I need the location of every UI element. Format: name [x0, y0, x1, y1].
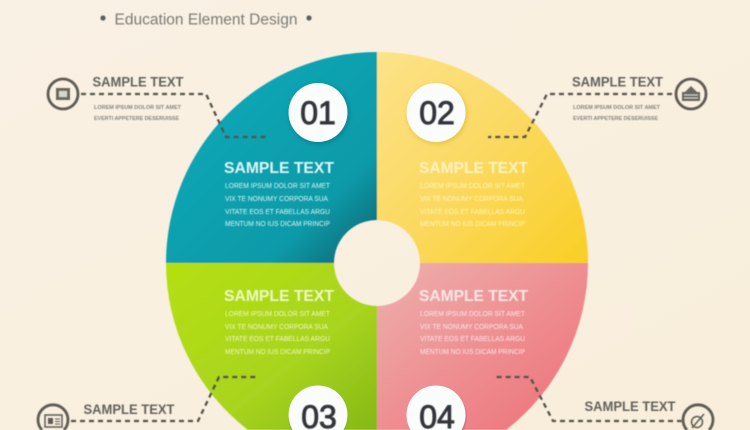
- icon: camera: [48, 79, 78, 109]
- connector 3: [71, 377, 257, 421]
- callout 3: [38, 402, 175, 430]
- panel 4 text: [419, 288, 528, 356]
- panel 2 text: MENTUM NO IUS DICAM PRINCIP: [420, 221, 525, 228]
- panel 2 text: VITATE EOS ET FABELLAS ARGU: [420, 209, 525, 216]
- segment 3: green: [166, 263, 377, 430]
- callout 3: SAMPLE TEXT: [84, 402, 175, 417]
- callout 1: LOREM IPSUM DOLOR SIT AMET: [94, 105, 182, 111]
- panel 1 text: SAMPLE TEXT: [224, 160, 334, 177]
- panel 4 text: SAMPLE TEXT: [419, 288, 528, 305]
- donut chart: [166, 52, 588, 430]
- panel 1 text: LOREM IPSUM DOLOR SIT AMET: [225, 183, 331, 190]
- icon: building: [676, 79, 706, 109]
- icon: disc: [683, 405, 713, 430]
- panel 3 text: SAMPLE TEXT: [224, 288, 334, 305]
- callout 4: SAMPLE TEXT: [584, 399, 676, 414]
- panel 3 text: [224, 288, 334, 356]
- callout 2: LOREM IPSUM DOLOR SIT AMET: [573, 105, 661, 111]
- panel 3 text: MENTUM NO IUS DICAM PRINCIP: [225, 349, 330, 356]
- panel 2 text: SAMPLE TEXT: [419, 160, 528, 177]
- panel 4 text: VITATE EOS ET FABELLAS ARGU: [420, 336, 525, 343]
- number badge 01: [288, 83, 349, 144]
- panel 3 text: VITATE EOS ET FABELLAS ARGU: [225, 336, 330, 343]
- number badge 01: 01: [300, 95, 336, 131]
- panel 4 text: LOREM IPSUM DOLOR SIT AMET: [420, 311, 526, 318]
- callout 4: [584, 399, 713, 430]
- panel 1 text: VITATE EOS ET FABELLAS ARGU: [225, 209, 330, 216]
- connector 2: [488, 94, 672, 137]
- callout 1: [48, 74, 184, 122]
- number badge 02: 02: [419, 95, 455, 131]
- number badge 03: [288, 385, 348, 430]
- panel 1 text: [224, 160, 334, 228]
- panel 4 text: MENTUM NO IUS DICAM PRINCIP: [420, 349, 525, 356]
- panel 3 text: LOREM IPSUM DOLOR SIT AMET: [225, 311, 331, 318]
- callout 2: EVERTI APPETERE DESERUISSE: [573, 116, 658, 122]
- segment 4: pink: [377, 263, 588, 430]
- panel 2 text: VIX TE NONUMY CORPORA SUA: [420, 196, 523, 203]
- connector 1: [81, 94, 266, 137]
- callout 2: [572, 74, 706, 122]
- callout 2: SAMPLE TEXT: [572, 74, 664, 90]
- number badge 04: [406, 385, 467, 430]
- panel 4 text: VIX TE NONUMY CORPORA SUA: [420, 324, 523, 331]
- title: Education Element Design: [114, 12, 298, 28]
- panel 2 text: LOREM IPSUM DOLOR SIT AMET: [420, 183, 526, 190]
- panel 1 text: MENTUM NO IUS DICAM PRINCIP: [225, 221, 330, 228]
- connector 4: [495, 377, 682, 421]
- panel 3 text: VIX TE NONUMY CORPORA SUA: [225, 324, 328, 331]
- number badge 02: [406, 83, 467, 144]
- segment 2: yellow: [377, 52, 588, 263]
- panel 1 text: VIX TE NONUMY CORPORA SUA: [225, 196, 328, 203]
- callout 1: SAMPLE TEXT: [92, 74, 184, 90]
- segment 1: teal: [166, 52, 377, 263]
- callout 1: EVERTI APPETERE DESERUISSE: [94, 116, 179, 122]
- panel 2 text: [419, 160, 528, 228]
- icon: id card: [38, 405, 68, 430]
